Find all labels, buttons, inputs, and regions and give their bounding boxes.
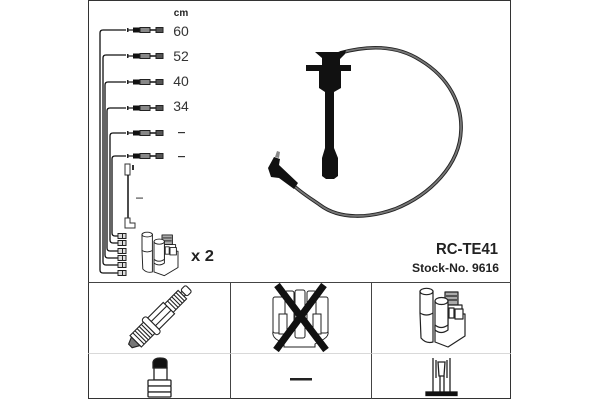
length labels [136,8,189,199]
short wire with angled ends [125,164,135,228]
quantity: x 2 [191,248,214,265]
frame [88,0,510,398]
boot: angled [268,151,298,189]
main ignition cable [268,48,461,216]
icon: coil small [142,232,178,276]
part number [412,241,499,275]
no-part dash [290,378,312,380]
icon: coil terminal [426,358,457,396]
wires [100,30,126,273]
icon: ignition coil [420,288,465,347]
boot: straight [306,50,351,179]
icon: distributor cap crossed [273,285,328,350]
terminals bottom [118,234,126,276]
length labels: 34 [173,98,189,114]
icon: spark plug [123,281,196,354]
icon: plug boot [148,358,171,397]
wiring diagram: cable set [100,28,163,276]
part number: RC-TE41 [436,241,498,258]
part number: Stock-No. 9616 [412,261,499,275]
length labels: 60 [173,23,189,39]
terminals top [127,28,163,158]
length labels: 52 [173,48,189,64]
length labels: cm [174,8,188,19]
length labels: 40 [173,73,189,89]
